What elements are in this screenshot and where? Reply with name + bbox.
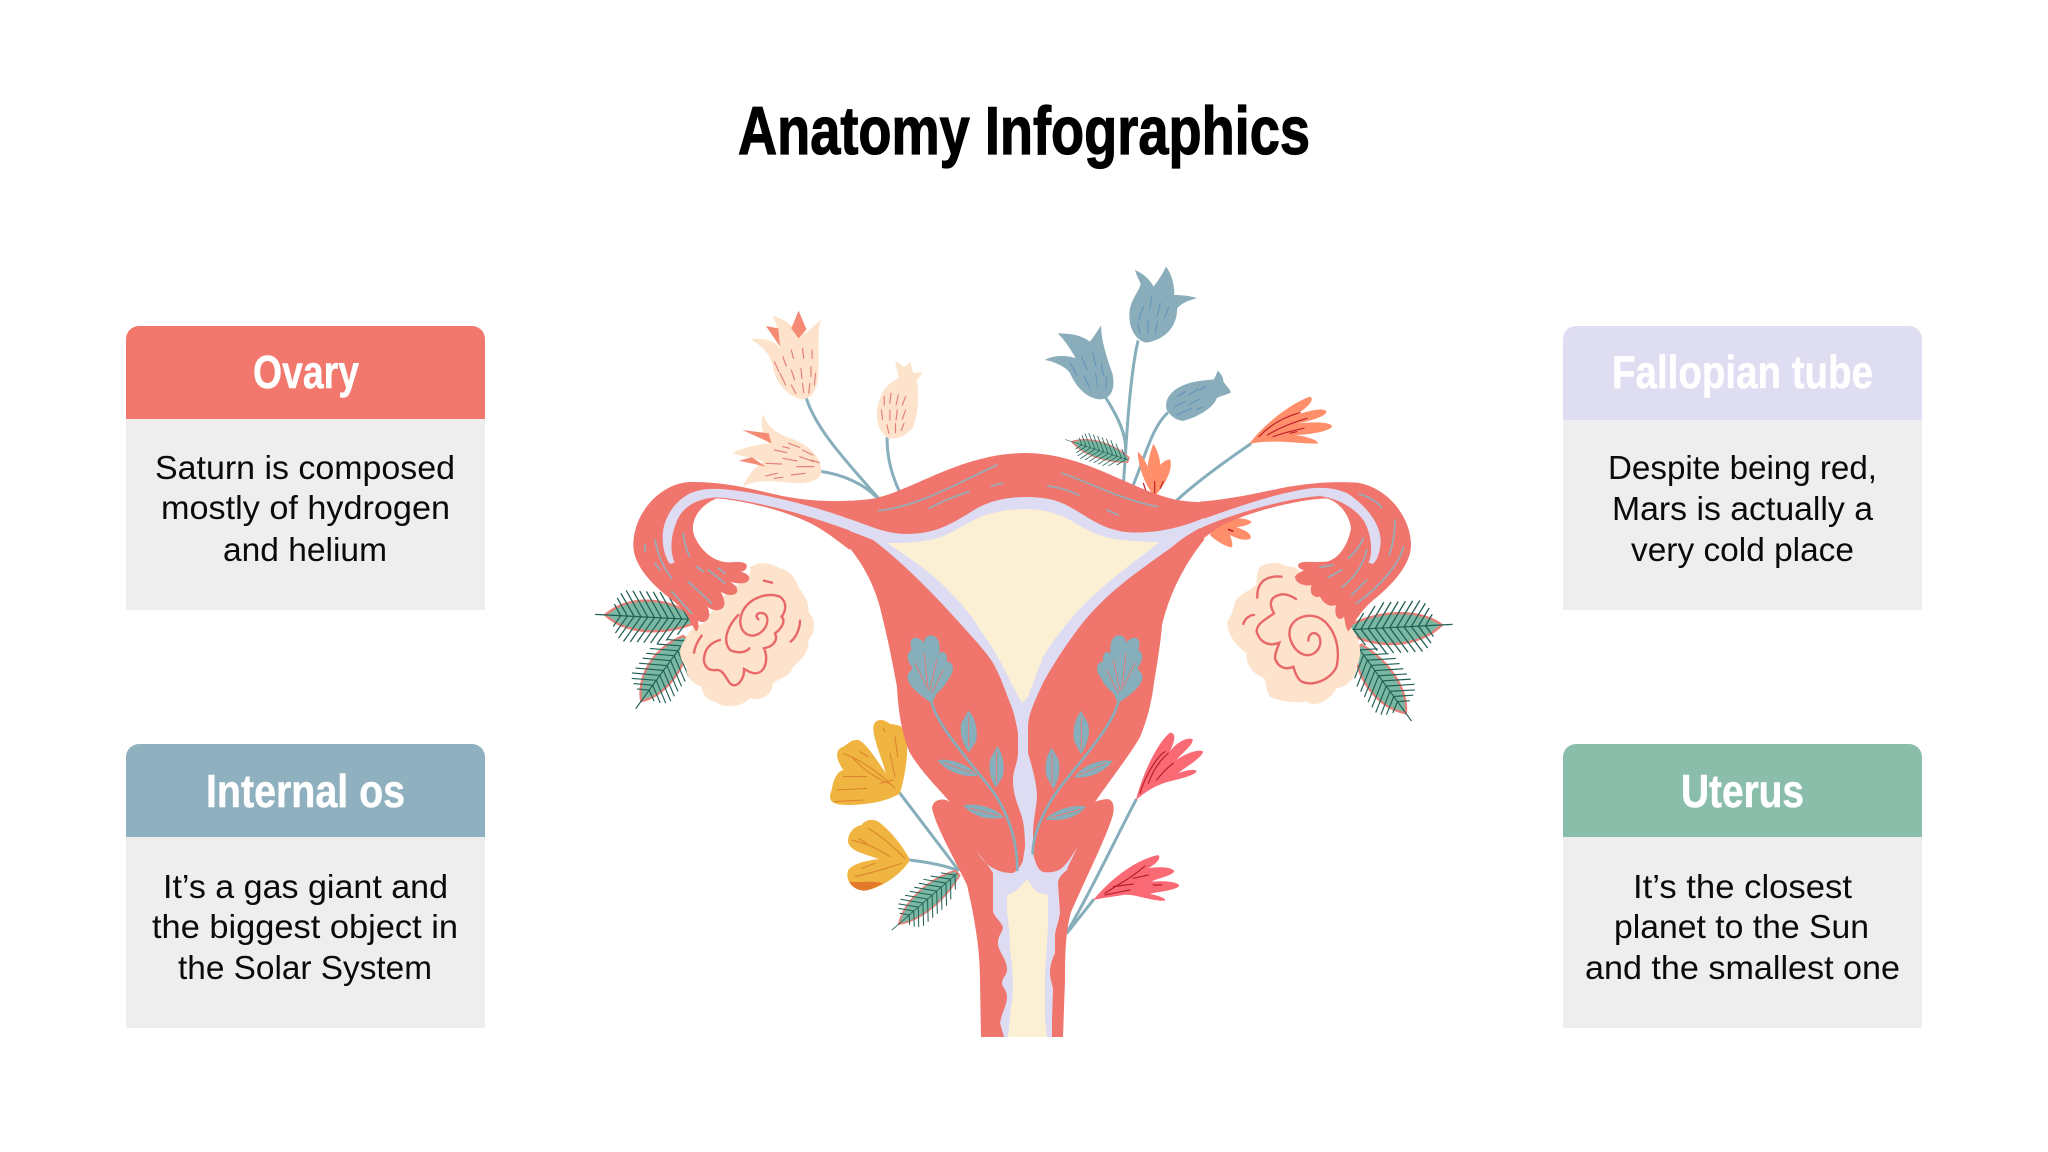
internal os description: the Solar System <box>178 949 432 986</box>
cervical canal <box>1007 880 1048 1037</box>
leaf: stem leaf top right <box>1061 427 1132 473</box>
internal os heading: Internal os <box>206 765 405 817</box>
uterus heading: Uterus <box>1681 765 1804 817</box>
flower: blue bell top <box>1129 267 1197 343</box>
plant right <box>1033 635 1143 853</box>
fallopian heading: Fallopian tube <box>1612 346 1873 398</box>
fallopian description <box>1608 449 1877 568</box>
ovary header <box>126 326 485 419</box>
panel: uterus <box>1563 744 1922 1028</box>
flower: red lower <box>1093 855 1179 901</box>
uterus header <box>1563 744 1922 837</box>
leaf: left lower <box>616 624 706 723</box>
flower: blue bud <box>1166 371 1231 421</box>
stems lower <box>900 793 1136 933</box>
ovary description: mostly of hydrogen <box>161 489 450 526</box>
title: Anatomy Infographics <box>738 93 1310 169</box>
flower: peach tulip low <box>732 414 821 486</box>
top flowers <box>732 267 1332 500</box>
fallopian description: very cold place <box>1631 531 1854 568</box>
ovary heading: Ovary <box>253 346 359 398</box>
ovary description: Saturn is composed <box>155 449 455 486</box>
leaf: right lower <box>1339 633 1431 735</box>
ovary description: and helium <box>223 531 387 568</box>
ovary description <box>155 449 455 568</box>
right fallopian tube <box>1200 482 1411 632</box>
flower: peach bud <box>877 362 923 438</box>
ovary left <box>680 563 814 706</box>
flower: small orange under right tube <box>1210 518 1252 547</box>
ovary right <box>1227 563 1360 704</box>
uterus description: planet to the Sun <box>1614 908 1869 945</box>
flower: blue bell left <box>1045 325 1113 399</box>
flower: orange behind dome <box>1138 444 1171 497</box>
body streaks <box>879 465 1157 515</box>
flower: yellow lower <box>847 820 910 891</box>
leaf: lower left <box>880 860 969 943</box>
fallopian card body <box>1563 400 1922 610</box>
fallopian header <box>1563 326 1922 420</box>
leaf: right upper <box>1349 599 1454 655</box>
uterine lining <box>850 497 1204 1037</box>
internal os header <box>126 744 485 837</box>
left fallopian tube <box>633 482 850 632</box>
panel: internal os <box>126 744 485 1028</box>
flower: red upper <box>1136 733 1203 800</box>
flower: orange right <box>1249 397 1332 444</box>
fallopian description: Mars is actually a <box>1612 490 1874 527</box>
internal os description <box>152 868 458 986</box>
panel: ovary <box>126 326 485 610</box>
uterus description: and the smallest one <box>1585 949 1900 986</box>
ovary card body <box>126 400 485 610</box>
uterine cavity <box>887 509 1160 703</box>
fallopian description: Despite being red, <box>1608 449 1877 486</box>
flower: peach tulip one <box>751 311 821 399</box>
lower flowers <box>830 720 1203 933</box>
internal os description: It’s a gas giant and <box>163 868 448 905</box>
uterus card body <box>1563 820 1922 1028</box>
internal os description: the biggest object in <box>152 908 458 945</box>
inner plants <box>907 635 1143 870</box>
leaf: left upper <box>594 589 693 645</box>
illustration: uterus with flowers <box>594 267 1454 1037</box>
uterus description <box>1585 868 1900 986</box>
internal os card body <box>126 820 485 1028</box>
uterus body <box>848 453 1204 1037</box>
uterus description: It’s the closest <box>1633 868 1852 905</box>
stems <box>805 342 1250 500</box>
panel: fallopian tube <box>1563 326 1922 610</box>
plant left <box>907 635 1017 870</box>
flower: yellow upper <box>830 720 907 805</box>
